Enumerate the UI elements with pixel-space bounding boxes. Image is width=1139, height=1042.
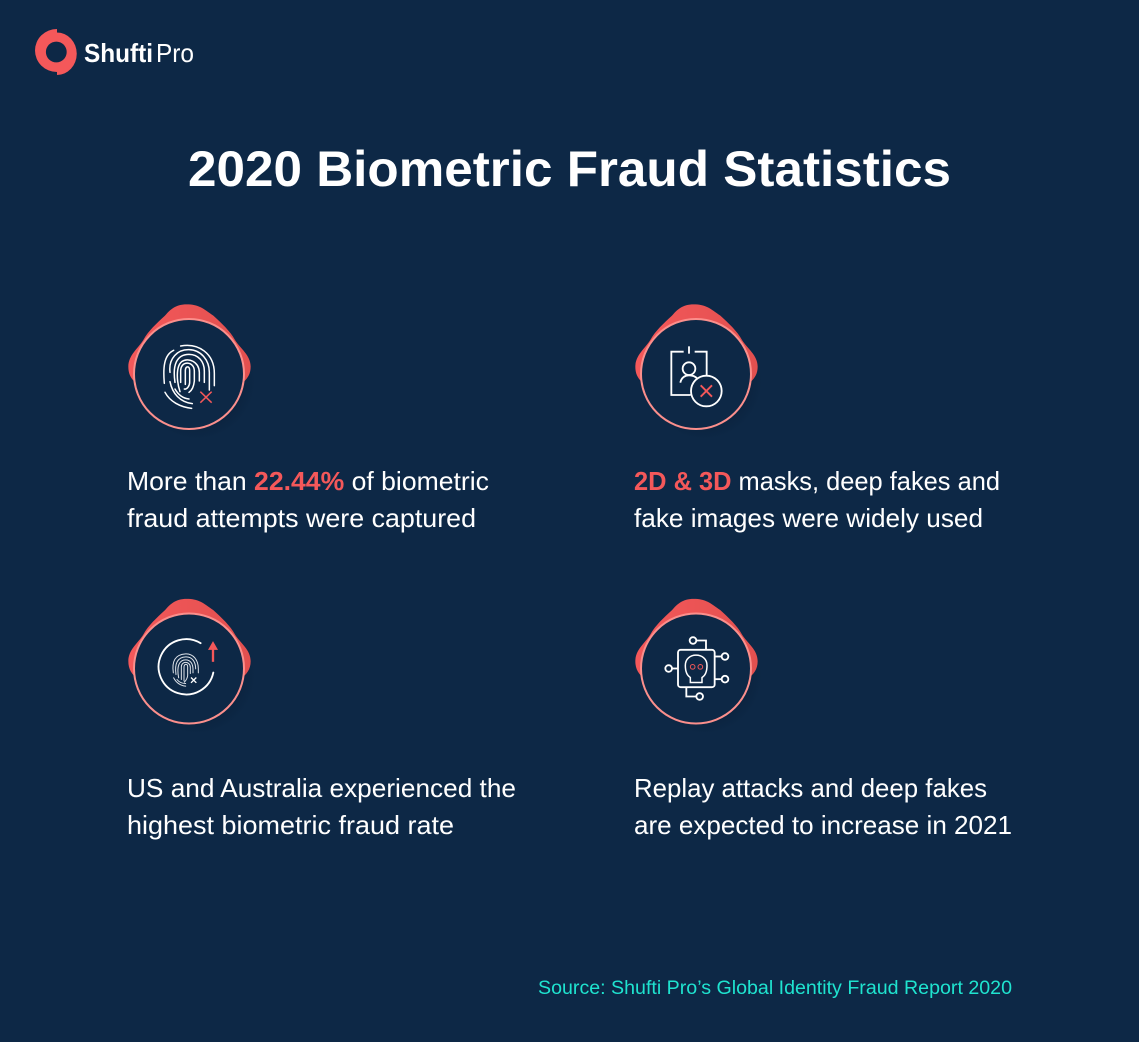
text: captured fraud attempts <box>127 468 489 533</box>
icon: fingerprint with rising arrow <box>128 599 255 734</box>
logo wordmark: Shufti <box>84 38 153 68</box>
text: replay attacks: are expected to increase in 2021 <box>634 812 1012 840</box>
text: masks and deep fakes: 2D & 3D masks, deep fakes and <box>634 468 1000 496</box>
text: replay attacks <box>634 775 1012 840</box>
text: masks and deep fakes <box>634 468 1000 533</box>
title: 2020 Biometric Fraud Statistics <box>188 141 951 197</box>
text: replay attacks: Replay attacks and deep fakes <box>634 775 987 803</box>
panel: replay attacks <box>634 599 1012 840</box>
source note: Source: Shufti Pro’s Global Identity Fraud Report 2020 <box>538 978 1012 999</box>
text: highest fraud rate: highest biometric fraud rate <box>127 812 454 840</box>
text: highest fraud rate <box>127 775 516 840</box>
text: masks and deep fakes: fake images were widely used <box>634 505 983 533</box>
panel: captured fraud attempts <box>127 304 489 533</box>
logo: Shufti Pro: Pro <box>156 38 194 68</box>
logo mark: red ring <box>35 29 77 75</box>
panel: highest fraud rate <box>127 599 516 840</box>
icon: skull on circuit chip <box>635 599 762 734</box>
text: captured fraud attempts: fraud attempts were captured <box>127 505 476 533</box>
icon: ID card with cross <box>635 304 762 439</box>
panel: masks and deep fakes <box>634 304 1000 533</box>
icon: fingerprint with cross <box>128 304 255 439</box>
text: captured fraud attempts: More than 22.44% of biometric <box>127 468 489 496</box>
text: highest fraud rate: US and Australia experienced the <box>127 775 516 803</box>
logo: Shufti Pro <box>35 29 194 75</box>
